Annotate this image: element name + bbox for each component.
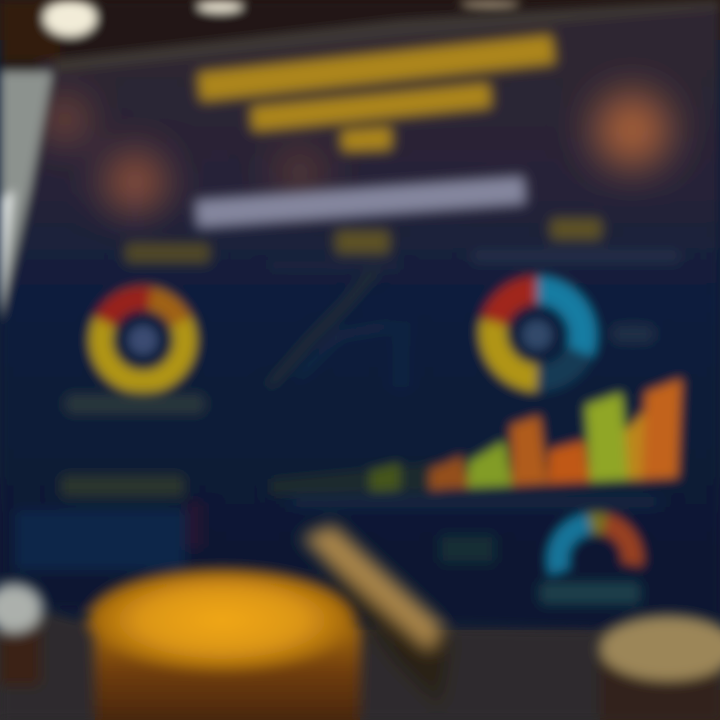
subtitle (195, 176, 526, 228)
icon: golden cup (88, 570, 360, 720)
caption: left donut (65, 394, 205, 414)
caption: bar chart (290, 496, 660, 508)
icon: cup lid (302, 525, 450, 705)
chart: small donut (558, 523, 633, 572)
text block: lower left (15, 474, 205, 570)
chart: bar chart (270, 378, 682, 496)
board light glows (45, 92, 670, 212)
chart: line chart (270, 270, 412, 390)
caption: small donut (540, 582, 640, 604)
table surface (0, 600, 720, 720)
title (197, 34, 556, 152)
chart: right donut (493, 290, 583, 378)
ceiling lights (44, 0, 518, 36)
icon: small left cup (0, 584, 42, 685)
legend: right donut (612, 325, 654, 343)
left wall wedge (0, 72, 52, 320)
text block: lower middle (440, 535, 495, 563)
chart: left donut (101, 298, 185, 382)
column headings (125, 218, 680, 270)
ceiling strip (0, 0, 720, 80)
icon: right cup (600, 616, 720, 720)
